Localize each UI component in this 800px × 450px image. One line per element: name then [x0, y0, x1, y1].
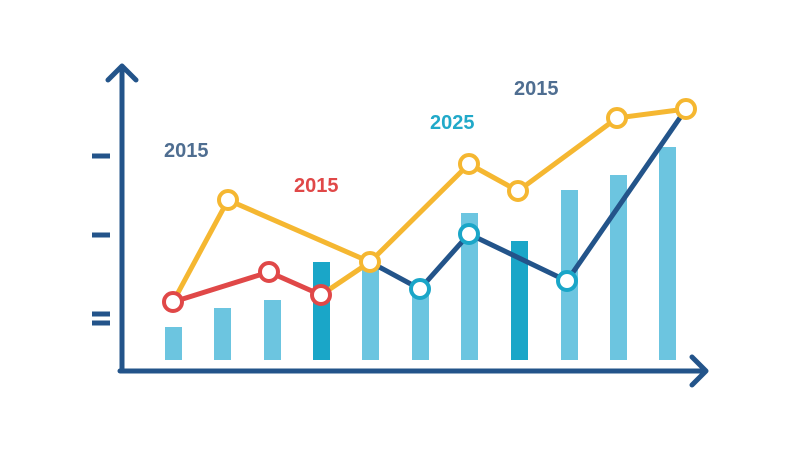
line: red: [173, 272, 321, 302]
label: 2025 teal: 2025: [430, 112, 474, 134]
label: 2015 slate: 2015: [164, 140, 208, 162]
label: 2015 top: 2015: [514, 78, 558, 100]
axes: [108, 66, 706, 385]
markers: [164, 100, 695, 311]
line: dark blue: [370, 109, 686, 289]
bars: [165, 147, 676, 360]
label: 2015 red: 2015: [294, 175, 338, 197]
line: yellow: [173, 109, 686, 302]
y ticks: [92, 156, 110, 323]
